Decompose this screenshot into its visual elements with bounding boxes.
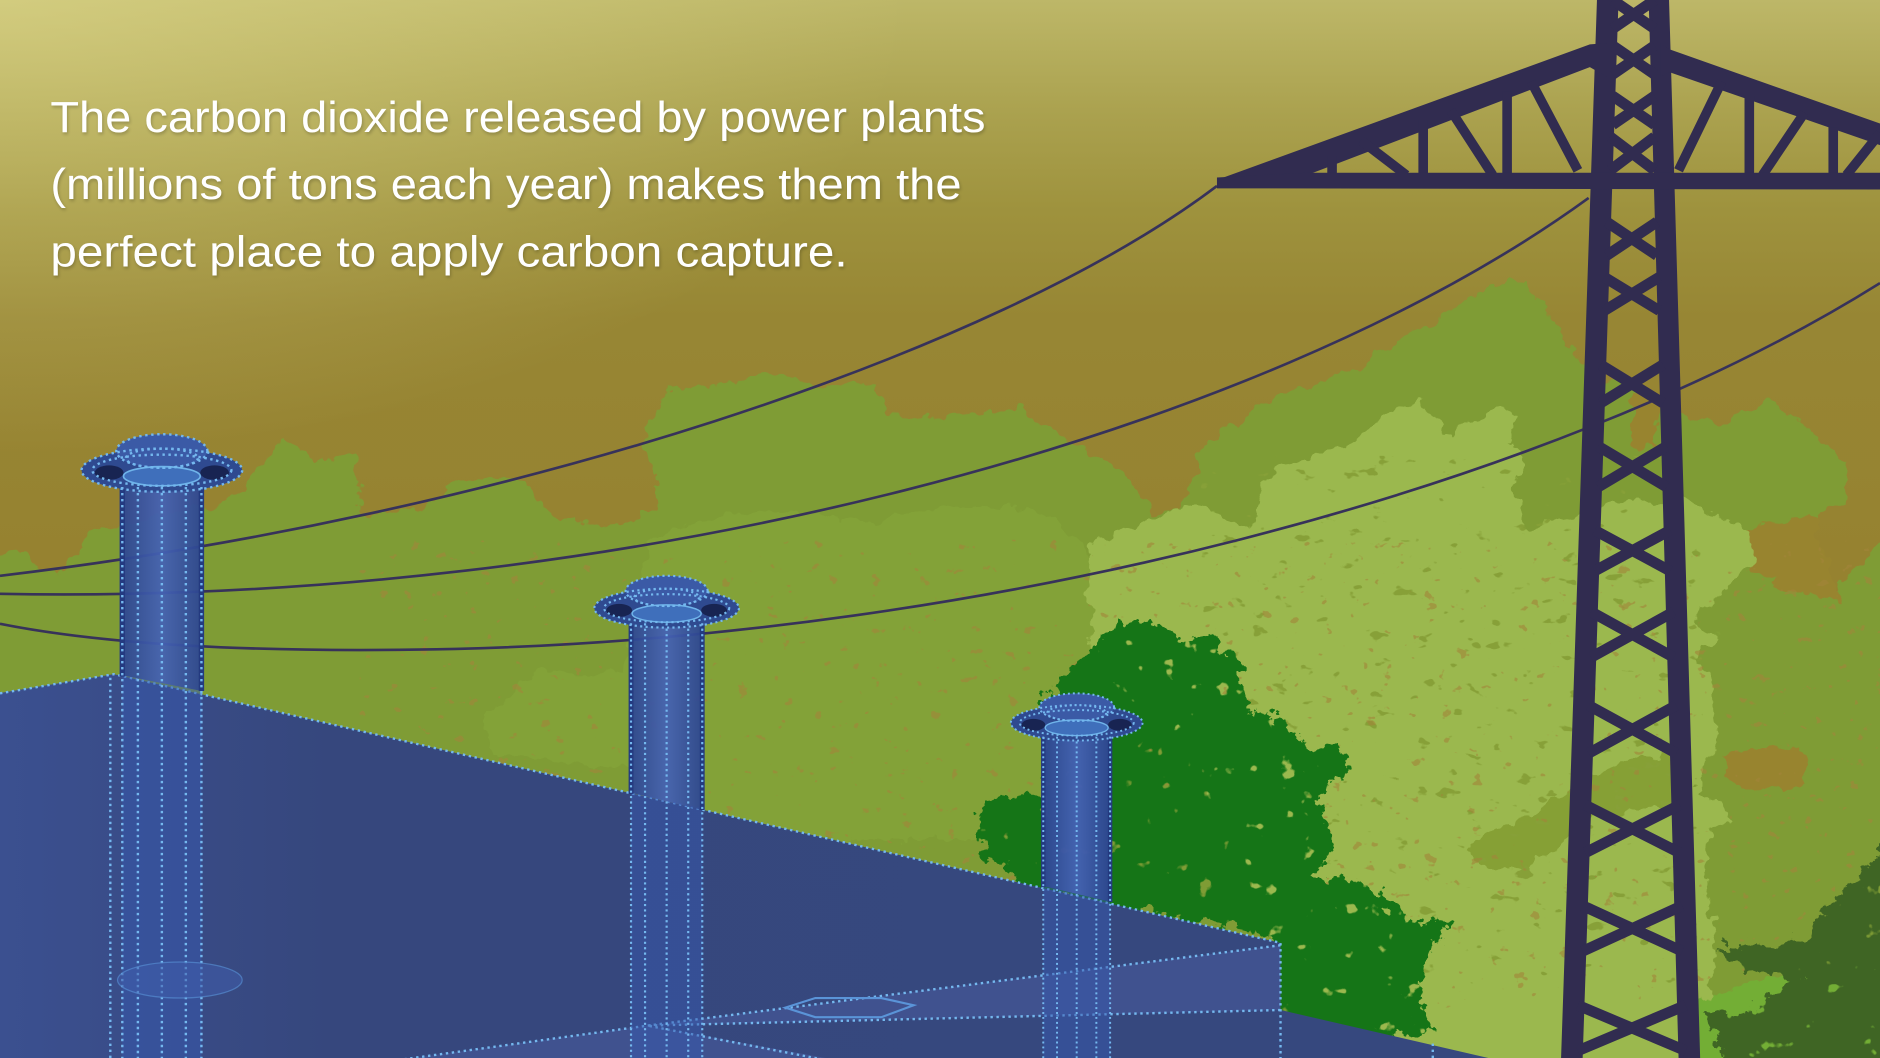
chimney stack left xyxy=(82,434,242,1058)
olive shadow patches in light tree xyxy=(1469,750,1685,870)
dark green tree xyxy=(977,621,1448,1036)
chimney stack centre xyxy=(594,576,739,1058)
building xyxy=(0,674,1499,1058)
power lines xyxy=(0,186,1880,650)
pylon cross bracing xyxy=(1578,0,1686,1051)
roof plane xyxy=(396,945,1281,1058)
electricity pylon xyxy=(1217,0,1880,1058)
pylon arm struts xyxy=(1332,82,1880,175)
headline text: (millions of tons each year) makes them the xyxy=(50,161,962,209)
light green tree xyxy=(1085,398,1752,1058)
pylon crossbeam xyxy=(1217,173,1880,190)
headline text: The carbon dioxide released by power plants xyxy=(50,94,986,142)
roof hatch xyxy=(785,998,914,1017)
background tree line xyxy=(0,278,1880,1058)
pylon left arm xyxy=(1217,43,1607,180)
headline text xyxy=(50,94,986,276)
pylon right arm xyxy=(1661,43,1880,145)
headline text: perfect place to apply carbon capture. xyxy=(50,228,848,276)
lower flange seen through wall xyxy=(118,962,242,998)
chimney stack right xyxy=(1011,693,1143,1058)
dark foreground tree lower right xyxy=(1705,840,1880,1058)
mid tree layer xyxy=(486,504,1103,840)
foliage speckles xyxy=(360,456,1880,1008)
brown gaps in background trees xyxy=(1633,390,1840,792)
pylon legs xyxy=(1561,0,1700,1058)
lower right bright foliage xyxy=(1679,960,1880,1058)
